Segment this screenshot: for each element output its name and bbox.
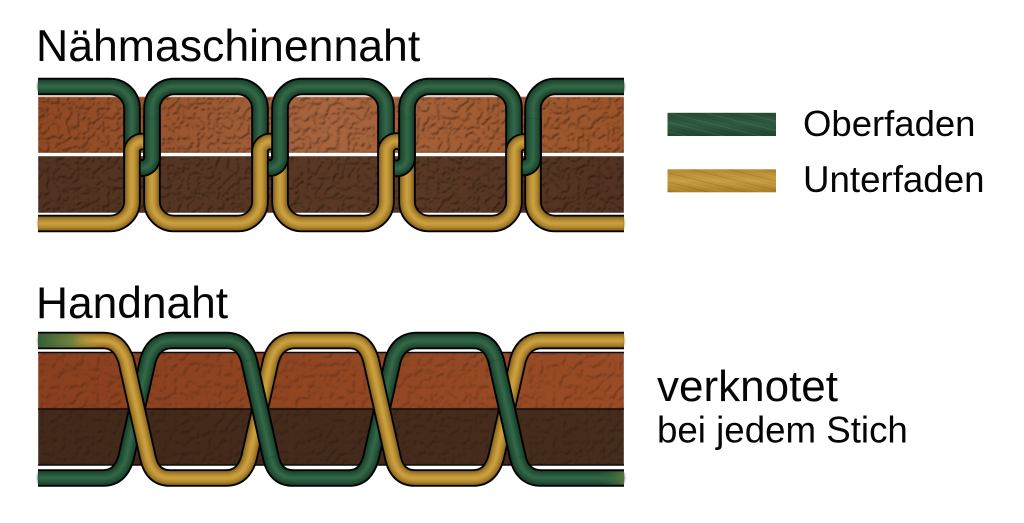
heading: Nähmaschinennaht: Nähmaschinennaht [36, 22, 421, 71]
thread colour fade, top left [38, 334, 102, 348]
note heading: verknotet [657, 362, 838, 411]
thread: machine upper thread [38, 86, 624, 168]
leather: upper hand layer [38, 352, 624, 409]
legend label: Unterfaden: Unterfaden [803, 159, 985, 200]
note: knotted at each stitch [657, 362, 908, 450]
panel: hand seam diagram [38, 334, 624, 484]
thread: upper thread interlock overlaps [142, 118, 533, 168]
note text: bei jedem Stich [657, 410, 908, 450]
legend label: Oberfaden: Oberfaden [803, 103, 975, 144]
panel: machine seam diagram [38, 86, 624, 224]
leather: lower machine layer [38, 156, 624, 213]
legend swatch: Oberfaden [668, 113, 776, 136]
leather: lower hand layer [38, 409, 624, 465]
thread colour fade, bottom right [596, 472, 624, 484]
thread: hand green thread [38, 340, 624, 478]
legend swatch: Unterfaden [668, 169, 776, 192]
thread: green crossing overlaps [249, 360, 518, 458]
legend [668, 103, 985, 200]
heading: Handnaht: Handnaht [36, 279, 228, 328]
leather: upper machine layer [38, 97, 624, 153]
thread: machine lower thread [38, 141, 624, 224]
thread: hand gold thread [38, 340, 624, 478]
leather outlines [38, 352, 624, 465]
